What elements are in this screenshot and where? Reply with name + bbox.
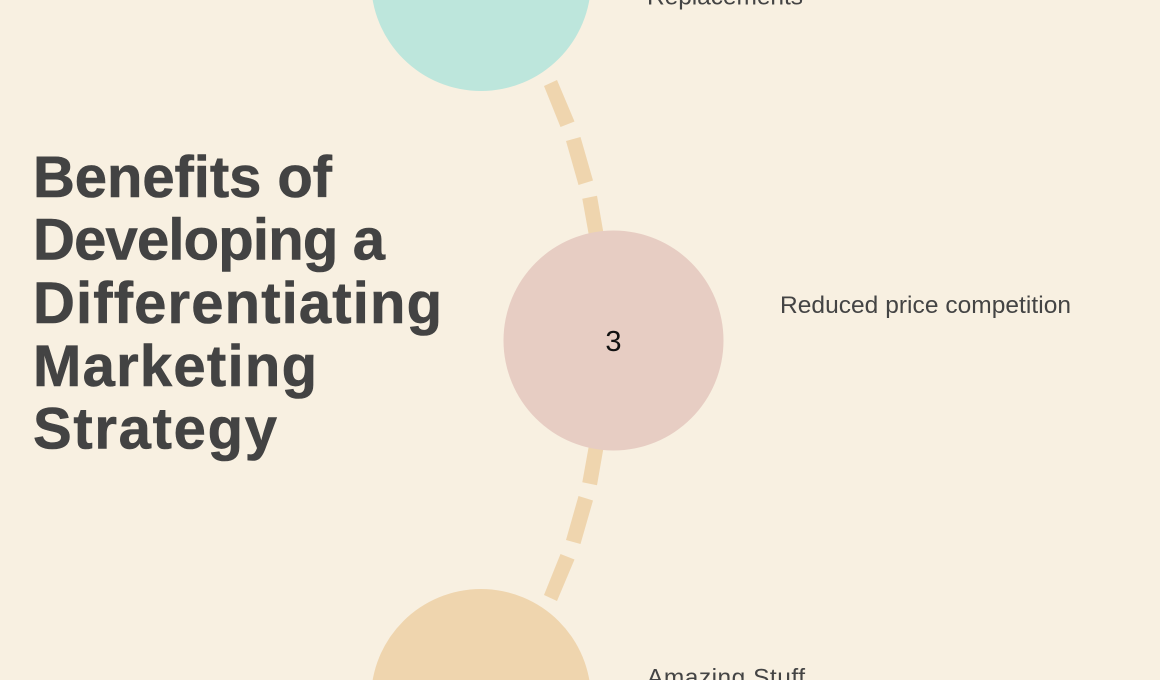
title xyxy=(33,145,442,462)
circle 3 (pink) xyxy=(504,230,724,450)
title: Differentiating xyxy=(33,271,442,336)
number 3: 3 xyxy=(605,326,622,358)
title: Developing a xyxy=(33,208,386,272)
dashed connector: middle circle to bottom circle xyxy=(544,445,604,601)
circle 4 (orange, cropped at bottom) xyxy=(371,589,591,680)
title: Marketing xyxy=(33,334,317,399)
circle 2 (teal, cropped at top) xyxy=(371,0,591,91)
title: Benefits of xyxy=(33,145,333,210)
dashed connector: top circle to middle circle xyxy=(544,80,604,236)
label: Reduced price competition: Reduced price competition xyxy=(780,292,1071,319)
title: Strategy xyxy=(33,396,277,462)
